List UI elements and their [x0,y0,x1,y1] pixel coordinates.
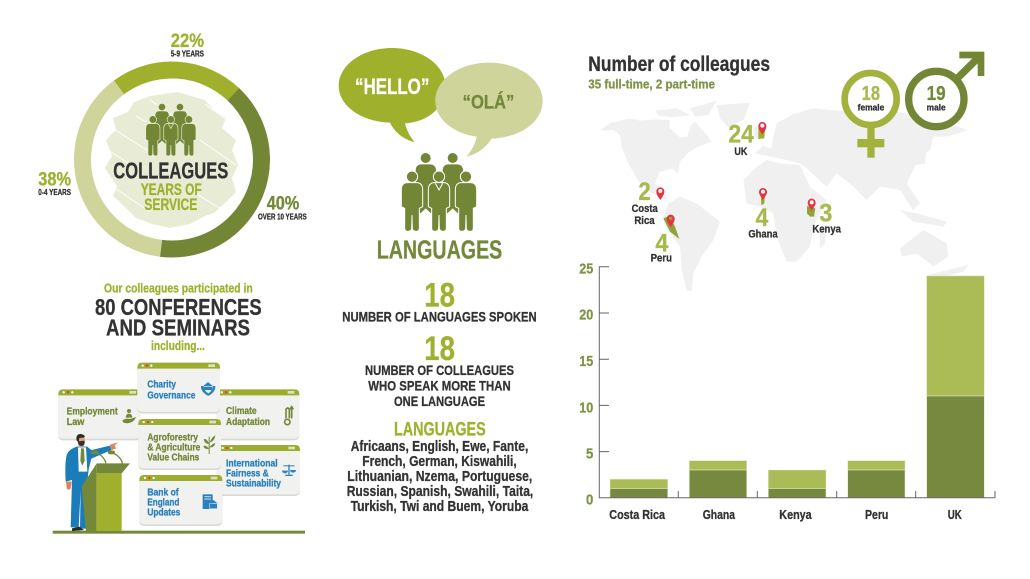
card: bank of england updates: Updates [147,508,181,519]
marker: Peru [651,215,679,265]
list: languages spoken: Turkish, Twi and Buem, Yoruba [351,499,529,515]
text block: conferences heading: 80 CONFERENCES [95,294,262,320]
list: languages spoken [347,420,533,515]
card: international fairness and sustainability: Fairness & [226,469,269,480]
y-axis labels: 0 [586,491,593,508]
stat: 22% 5-9 years: 5-9 YEARS [171,50,205,59]
marker: UK: 24 [728,122,754,149]
microphones [92,451,123,464]
heading: colleagues: COLLEAGUES [113,157,228,183]
gender: male symbol [909,52,984,127]
illustration: speaker at lectern [53,434,305,534]
x-axis labels: Costa Rica [609,507,666,522]
icon: group of colleagues [401,153,477,231]
card: agroforestry and agriculture value chains [138,419,221,470]
scribble background [105,92,238,228]
x-axis labels: UK [948,507,962,522]
subheading: years of service [141,181,202,214]
stat: multilingual colleagues [365,330,514,409]
panel: conference topic cards [58,363,300,526]
donut segment: over 10 years [45,33,299,286]
card: charity governance: Charity [147,380,176,391]
subheading: years of service: YEARS OF [141,181,202,199]
speech bubble: hello: “HELLO” [355,74,429,99]
floor [53,531,305,534]
x-axis labels: Ghana [703,507,736,522]
stat: multilingual colleagues: 18 [424,330,455,368]
card: bank of england updates: Bank of [147,488,179,499]
stat: 40% over 10 years: 40% [267,193,299,214]
marker: Kenya: 3 [819,201,832,228]
marker: UK: UK [734,146,747,158]
donut segment: 5-9 years [47,35,297,284]
heading: number of colleagues: Number of colleagues [588,53,770,76]
gender: female symbol: female [858,102,884,112]
card: international fairness and sustainability: Sustainability [226,479,281,490]
marker: Kenya [807,199,842,236]
y-axis labels: 25 [579,260,593,277]
donut segment: 0-4 years [72,59,272,260]
icon: plant [203,435,215,454]
card: international fairness and sustainability: International [226,459,278,470]
card: climate adaptation: Climate [226,406,257,417]
marker: Costa Rica: Costa [632,203,658,215]
card: agroforestry and agriculture value chains: Agroforestry [147,433,198,444]
stat: 38% 0-4 years [38,170,72,197]
y-axis labels [579,260,593,508]
stat: 38% 0-4 years: 0-4 YEARS [38,188,72,197]
panel: languages [339,48,543,515]
icon: documents and bank [203,494,218,509]
stat: 22% 5-9 years: 22% [171,31,204,52]
map markers and country totals [632,122,842,265]
list: languages spoken: Russian, Spanish, Swahili, Taita, [347,484,533,500]
icon: thermometer [285,407,293,425]
gender: male symbol: male [927,102,946,112]
marker: Ghana: 4 [756,205,769,232]
stat: multilingual colleagues: WHO SPEAK MORE THAN [368,378,511,394]
card: charity governance [137,363,220,414]
gender: female symbol [845,73,897,158]
marker: UK [728,122,766,158]
panel: colleagues years of service donut [38,31,307,286]
stat: 38% 0-4 years: 38% [38,170,71,191]
y-axis labels: 10 [579,399,593,416]
speech bubble: hello [339,48,445,142]
x-axis labels [609,507,962,522]
card: charity governance: Governance [147,391,196,402]
speech bubble: ola: “OLÁ” [463,90,514,113]
stat: 40% over 10 years: OVER 10 YEARS [258,212,307,221]
card: bank of england updates: England [147,498,179,509]
stat: multilingual colleagues: NUMBER OF COLLEAGUES [365,362,514,378]
stat: 22% 5-9 years [171,31,205,59]
marker: Peru: Peru [651,253,672,265]
world map [600,101,968,292]
marker: Costa Rica: 2 [638,179,651,206]
x-axis labels: Peru [865,507,888,522]
card: climate adaptation: Adaptation [226,417,270,428]
stat: languages spoken: 18 [424,277,455,315]
speech bubble: ola [435,63,543,157]
list: languages spoken: Lithuanian, Nzema, Portuguese, [347,469,532,485]
text block: conferences heading: Our colleagues participated in [104,281,253,296]
subheading: full-time and part-time: 35 full-time, 2 part-time [588,76,715,91]
list: languages spoken: Africaans, English, Ewe, Fante, [351,439,528,455]
marker: Costa Rica [632,179,664,227]
text block: conferences heading: including... [151,338,205,353]
list: languages spoken: French, German, Kiswahili, [362,454,517,470]
stat: 40% over 10 years [258,193,307,221]
card: employment law [58,389,141,440]
axes [599,267,995,498]
stat: languages spoken: NUMBER OF LANGUAGES SPOKEN [342,309,537,325]
card: international fairness and sustainability [217,445,300,496]
card: agroforestry and agriculture value chains: & Agriculture [147,442,201,453]
bars [610,276,984,498]
icon: group of colleagues [146,104,196,156]
list: languages spoken: LANGUAGES [394,420,486,441]
panel: number of colleagues [579,52,995,522]
card: bank of england updates [139,475,222,526]
marker: Ghana [748,188,778,240]
marker: Kenya: Kenya [812,224,842,236]
subheading: years of service: SERVICE [144,196,197,214]
lectern [82,463,130,531]
stat: multilingual colleagues: ONE LANGUAGE [394,393,485,409]
x-axis labels: Kenya [779,507,812,522]
gender: female symbol: 18 [862,83,880,105]
card: employment law: Law [67,417,85,428]
marker: Peru: 4 [655,231,669,258]
gender: male symbol: 19 [927,83,946,105]
y-axis labels: 5 [586,445,593,462]
card: employment law: Employment [67,406,118,417]
icon: scales [282,465,296,476]
icon: hands with building [201,382,215,396]
man [65,434,118,531]
card: climate adaptation [217,389,299,440]
bar chart: colleagues by country [579,260,995,522]
marker: Ghana: Ghana [748,228,778,240]
heading: languages: LANGUAGES [377,234,502,264]
y-axis labels: 15 [579,353,593,370]
text block: conferences heading: AND SEMINARS [106,315,250,341]
icon: hand holding person [122,409,136,423]
stat: languages spoken [342,277,537,325]
y-axis labels: 20 [579,306,593,323]
card: agroforestry and agriculture value chains: Value Chains [147,452,200,463]
text block: conferences heading [95,281,262,353]
marker: Costa Rica: Rica [634,215,655,227]
